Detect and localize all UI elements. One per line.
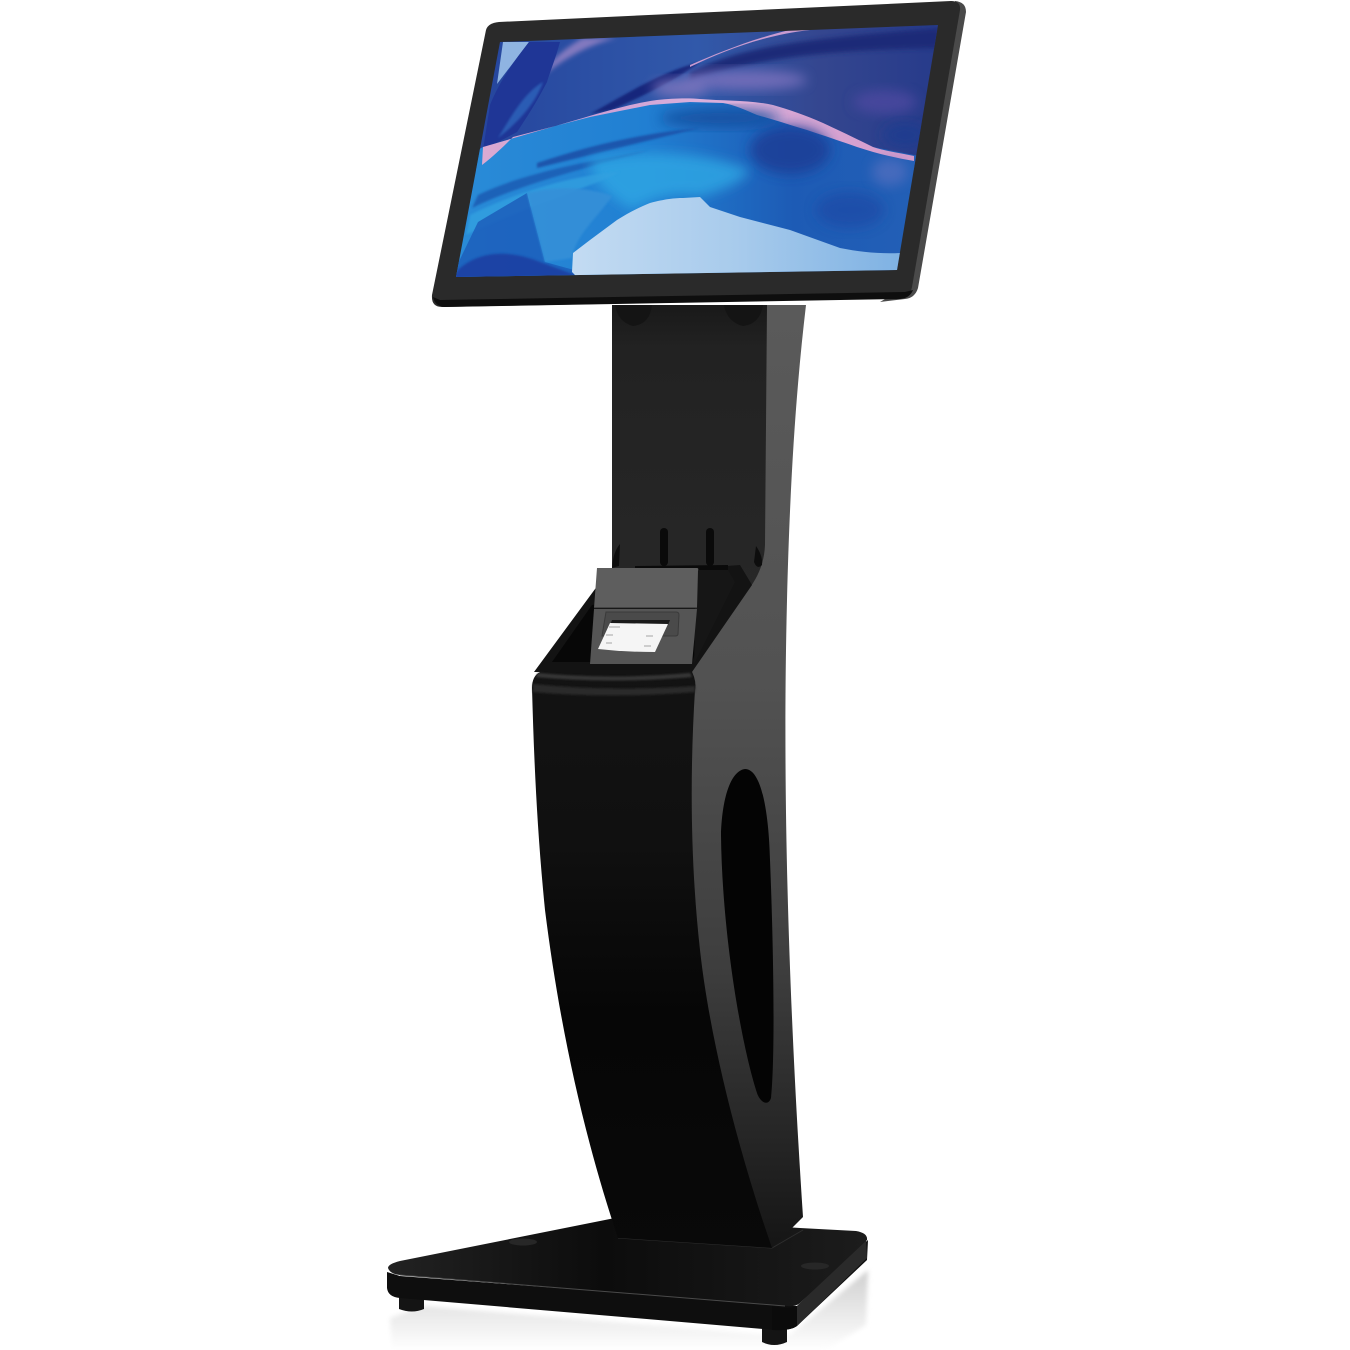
kiosk front face: [532, 668, 772, 1248]
mount slots: [612, 528, 762, 568]
deep blue lower left: [450, 193, 574, 280]
sky area: [572, 197, 900, 282]
receipt: [598, 623, 668, 652]
monitor bezel: [432, 1, 960, 307]
lavender sheen upper left: [550, 38, 614, 74]
floor shadow: [390, 1270, 868, 1350]
printer front: [590, 609, 697, 664]
printer top cover: [594, 568, 698, 608]
monitor screen artwork: [450, 20, 945, 285]
corner sky: [497, 42, 529, 84]
dark streak: [590, 62, 700, 114]
printer cavity: [534, 565, 752, 672]
monitor side edge: [880, 1, 966, 302]
illustration: touchscreen kiosk: [387, 1, 966, 1345]
paper slot: [602, 612, 679, 636]
monitor: [432, 1, 966, 307]
lower silk: [456, 102, 916, 277]
base plate: [387, 1217, 868, 1345]
printer rear body: [694, 568, 735, 664]
hand hole: [721, 769, 774, 1103]
pink streak: [690, 30, 810, 67]
front rim highlight: [533, 673, 695, 696]
purple glow: [683, 70, 807, 90]
foot: left: [399, 1296, 424, 1312]
pink ribbon: [482, 98, 914, 165]
upper silk: [450, 20, 945, 170]
bolt cap: [509, 1238, 537, 1246]
bolt cap: [801, 1262, 829, 1270]
bright cyan folds: [590, 153, 750, 210]
column side panel: [680, 305, 806, 1248]
cavity inner floor: [552, 590, 700, 662]
dark fold at left: [483, 42, 560, 150]
receipt printer: [590, 565, 735, 664]
hinge brackets: [615, 305, 763, 326]
upper column: [612, 305, 770, 590]
foot: front: [762, 1326, 787, 1345]
deep folds in lower silk: [750, 126, 830, 174]
navy right area: [690, 28, 940, 80]
lighter fold: [498, 82, 543, 138]
